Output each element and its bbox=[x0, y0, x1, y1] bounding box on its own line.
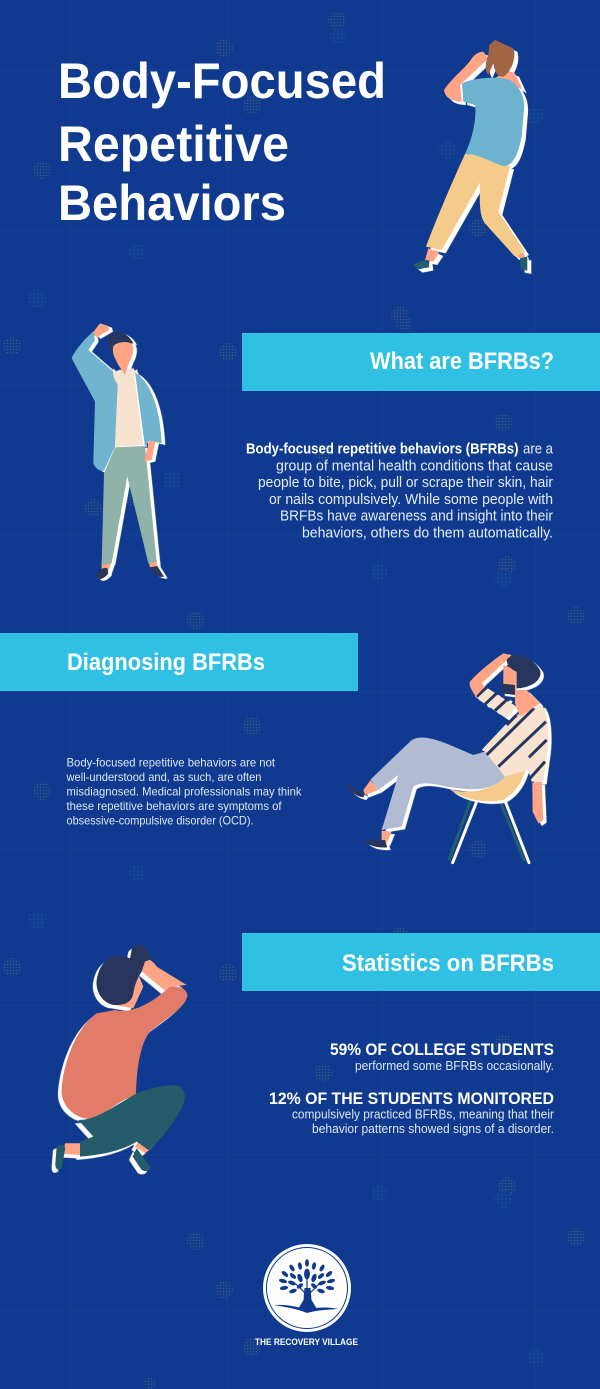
illustration: man scratching head, standing bbox=[72, 323, 164, 579]
icon: tree badge bbox=[263, 1244, 351, 1332]
title: Body-Focused bbox=[58, 53, 386, 109]
seated figure bbox=[347, 653, 548, 847]
banner: what are BFRBs: What are BFRBs? bbox=[370, 349, 554, 375]
text block: diagnosing: misdiagnosed. Medical professionals may think bbox=[66, 784, 302, 798]
text block: diagnosing bbox=[66, 756, 302, 828]
text block: statistics: 12% OF THE STUDENTS MONITORED bbox=[269, 1090, 554, 1108]
logo wordmark: THE RECOVERY VILLAGE bbox=[255, 1337, 358, 1348]
title bbox=[58, 53, 386, 231]
text block: BFRB definition: are a bbox=[523, 442, 554, 458]
text block: diagnosing: Body-focused repetitive behaviors are not bbox=[66, 756, 276, 770]
illustration: person crouching, holding head bbox=[55, 945, 187, 1171]
text block: diagnosing: well-understood and, as such, are often bbox=[66, 770, 262, 784]
title: Behaviors bbox=[58, 175, 286, 231]
text block: statistics: compulsively practiced BFRBs, meaning that their bbox=[292, 1108, 554, 1122]
banner: diagnosing BFRBs bbox=[0, 633, 358, 691]
illustration: person reclining on chair bbox=[347, 653, 548, 863]
text block: BFRB definition: or nails compulsively. While some people with bbox=[269, 492, 553, 508]
text block: statistics: behavior patterns showed signs of a disorder. bbox=[312, 1122, 554, 1136]
banner: what are BFRBs bbox=[242, 333, 600, 391]
text block: statistics bbox=[269, 1041, 554, 1136]
illustration: man holding head, standing bbox=[413, 40, 527, 271]
text block: BFRB definition bbox=[246, 442, 554, 542]
text block: statistics: performed some BFRBs occasionally. bbox=[355, 1059, 554, 1073]
text block: BFRB definition: Body-focused repetitive behaviors (BFRBs) bbox=[246, 442, 519, 458]
text block: BFRB definition: BRFBs have awareness and insight into their bbox=[280, 509, 553, 525]
chair legs bbox=[449, 799, 529, 863]
text block: statistics: 59% OF COLLEGE STUDENTS bbox=[330, 1041, 554, 1059]
text block: BFRB definition: behaviors, others do them automatically. bbox=[302, 526, 553, 542]
banner: statistics on BFRBs: Statistics on BFRBs bbox=[342, 951, 554, 977]
logo: The Recovery Village bbox=[255, 1244, 358, 1348]
text block: BFRB definition: group of mental health conditions that cause bbox=[276, 458, 553, 474]
text block: BFRB definition: people to bite, pick, pull or scrape their skin, hair bbox=[258, 475, 553, 491]
banner: diagnosing BFRBs: Diagnosing BFRBs bbox=[67, 650, 265, 676]
text block: diagnosing: these repetitive behaviors are symptoms of bbox=[66, 799, 282, 813]
text block: diagnosing: obsessive-compulsive disorder (OCD). bbox=[66, 814, 254, 828]
title: Repetitive bbox=[58, 116, 289, 172]
banner: statistics on BFRBs bbox=[242, 933, 600, 991]
